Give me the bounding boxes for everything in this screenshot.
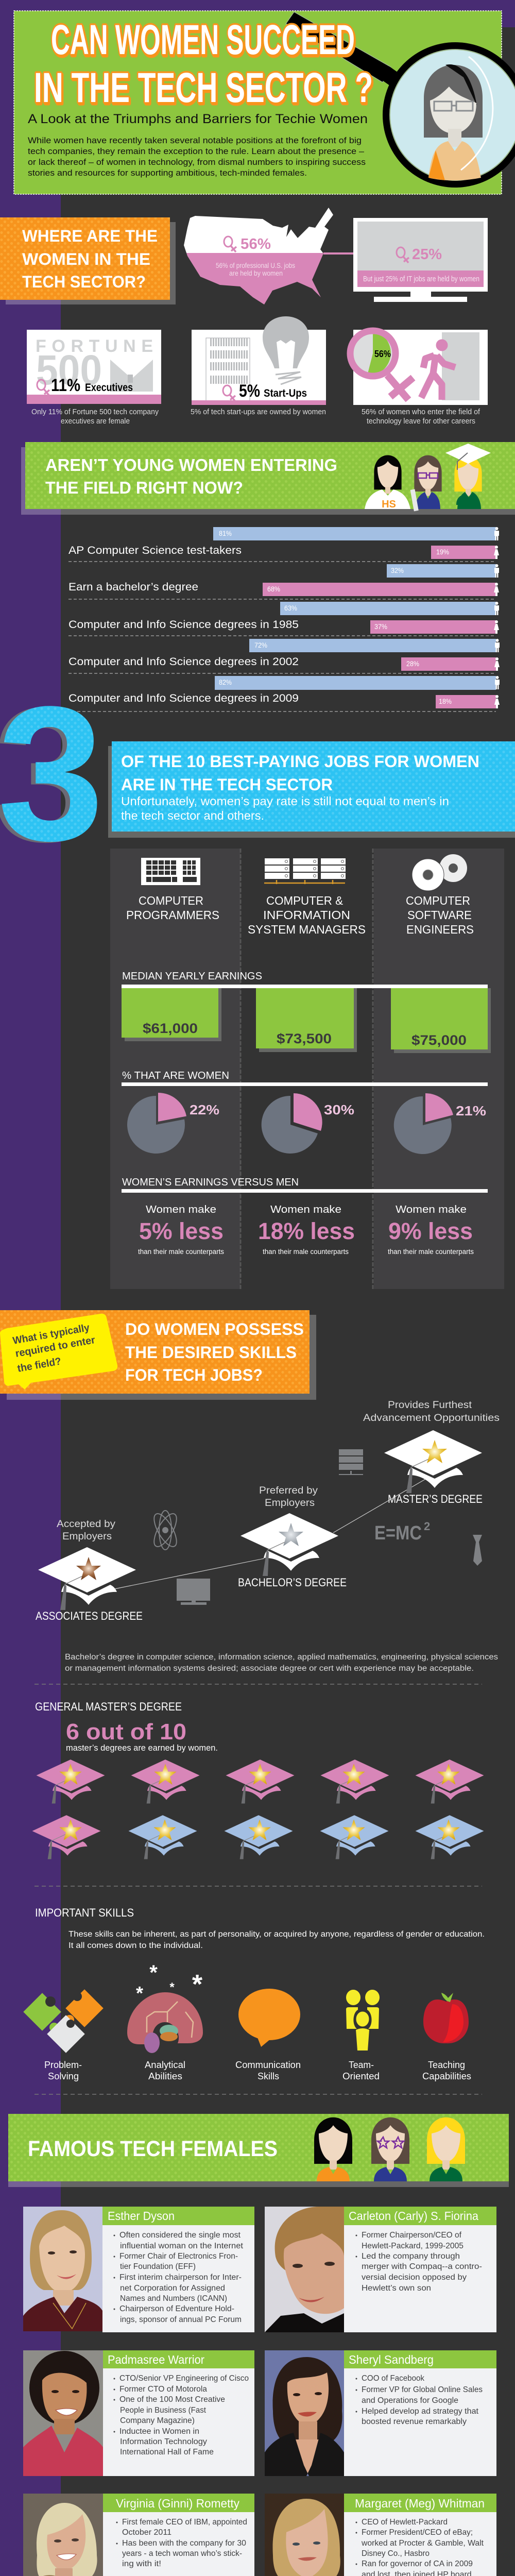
- card: Ginni Rometty: ing with it!: [122, 2560, 161, 2568]
- panel: earnings versus men: 18% less: [258, 1218, 355, 1244]
- icon: briefcase: [110, 356, 153, 392]
- icon: atom: [150, 1511, 181, 1550]
- icon: brain: *: [169, 1980, 175, 1994]
- icon: discs: [412, 854, 467, 891]
- skill labels: [44, 2060, 471, 2081]
- bachelor's cap: BACHELOR’S DEGREE: [238, 1576, 347, 1589]
- chart: percent that are women: 21%: [456, 1103, 486, 1118]
- job titles: SYSTEM MANAGERS: [248, 923, 366, 936]
- card: Padmasree Warrior: Inductee in Women in: [119, 2427, 199, 2436]
- icon: gray monitor: [177, 1579, 210, 1605]
- intro paragraph: or lack thereof – of women in technology, from dismal numbers to inspiring success: [28, 158, 366, 167]
- heading: aren't young women entering: AREN’T YOUNG WOMEN ENTERING: [45, 455, 337, 474]
- callout: what is typically required: What is typically: [12, 1322, 91, 1347]
- photo: Carly Fiorina: [265, 2207, 344, 2332]
- caption: leaving the field: [362, 408, 480, 426]
- card: Sheryl Sandberg: Sheryl Sandberg: [349, 2353, 434, 2366]
- job titles: INFORMATION: [263, 908, 350, 922]
- heading: aren't young women entering: [21, 442, 515, 515]
- card: Esther Dyson: First interim chairperson for Inter-: [119, 2273, 242, 2282]
- icon: walking person: [421, 343, 455, 400]
- heading: 3 of the 10 best-paying jobs: Unfortunately, women’s pay rate is still not equal to men’s in: [121, 794, 449, 808]
- chart: female symbol pie 56%: 56%: [374, 349, 391, 359]
- caption: Fortune 500: executives are female: [61, 417, 130, 426]
- card: Ginni Rometty: October 2011: [122, 2528, 171, 2537]
- panel: important skills: IMPORTANT SKILLS: [35, 1906, 134, 1919]
- job titles: COMPUTER: [139, 894, 203, 907]
- heading: aren't young women entering: THE FIELD RIGHT NOW?: [45, 478, 243, 497]
- chart: percent that are women: 30%: [324, 1102, 354, 1117]
- text: degree paragraph: Bachelor’s degree in computer science, information science, applied mathematics, engineering, physical sciences: [65, 1653, 498, 1662]
- card: Fortune 500 executives: FORTUNE: [36, 336, 153, 356]
- intro paragraph: stories and resources for supporting ambitious, tech-minded females.: [28, 168, 307, 178]
- card: Ginni Rometty: Virginia (Ginni) Rometty: [116, 2497, 239, 2510]
- photo: Padmasree Warrior: [23, 2350, 103, 2476]
- chart: US map 56%: [184, 208, 333, 304]
- title text: [34, 16, 373, 111]
- card: Sheryl Sandberg: boosted revenue remarkably: [362, 2417, 467, 2426]
- caption: leaving the field: 56% of women who enter the field of: [362, 408, 480, 416]
- chart: female symbol pie 56%: [350, 331, 413, 400]
- panel: important skills: These skills can be inherent, as part of personality, or acquired by anyone, regardless of gender or education.: [68, 1930, 485, 1939]
- card: Esther Dyson: tier Foundation (EFF): [120, 2262, 196, 2271]
- chart: degrees 2009: Computer and Info Science degrees in 2009: [68, 692, 299, 704]
- icon: monitor 25%: [353, 218, 488, 302]
- job titles: PROGRAMMERS: [126, 908, 219, 922]
- card: Esther Dyson: Names and Numbers (ICANN): [120, 2294, 227, 2303]
- panel: job columns: [110, 849, 504, 1289]
- panel: important skills: It all comes down to the individual.: [68, 1941, 203, 1950]
- panel: earnings versus men: 9% less: [388, 1218, 473, 1244]
- card: Esther Dyson: Esther Dyson: [108, 2209, 175, 2223]
- card: Padmasree Warrior: Company Magazine): [120, 2416, 195, 2425]
- card: Meg Whitman: Ran for governor of CA in 2009: [362, 2560, 473, 2568]
- card: Meg Whitman: CEO of Hewlett-Packard: [362, 2518, 448, 2527]
- job titles: ENGINEERS: [406, 923, 474, 936]
- card: Carly Fiorina: versial decision opposed by: [362, 2273, 467, 2282]
- subtitle: A Look at the Triumphs and Barriers for Techie Women: [28, 112, 368, 126]
- skill labels: Team-: [349, 2060, 374, 2070]
- title panel background: [14, 11, 502, 194]
- card: Sheryl Sandberg: [265, 2350, 496, 2476]
- caption: Fortune 500: [31, 408, 159, 426]
- chart: median yearly earnings: [122, 971, 491, 1053]
- formula: E=MC: [374, 1522, 422, 1544]
- heading: where are the women: TECH SECTOR?: [22, 273, 146, 291]
- skill labels: Solving: [48, 2071, 79, 2081]
- heading: where are the women: WOMEN IN THE: [22, 250, 150, 268]
- big number 3: 3: [0, 666, 104, 880]
- panel: earnings versus men: [122, 1177, 488, 1256]
- caption: start-ups: 5% of tech start-ups are owned by women: [191, 408, 326, 416]
- card: start-ups: Start-Ups: [264, 387, 307, 399]
- card: Esther Dyson: Chairperson of Edventure Hold-: [119, 2304, 234, 2313]
- chart: degrees 1985: 37%: [374, 622, 387, 631]
- panel: earnings versus men: Women make: [270, 1204, 341, 1215]
- panel: general master's degree: 6 out of 10: [66, 1719, 186, 1744]
- card: Esther Dyson: Former Chair of Electronics Fron-: [119, 2252, 238, 2261]
- card: Meg Whitman: Margaret (Meg) Whitman: [355, 2497, 485, 2510]
- card: Meg Whitman: worked at Procter & Gamble, Walt: [361, 2539, 484, 2548]
- card: Padmasree Warrior: Padmasree Warrior: [108, 2353, 204, 2366]
- card: Sheryl Sandberg: Helped develop ad strategy that: [362, 2407, 479, 2416]
- card: Padmasree Warrior: One of the 100 Most Creative: [119, 2395, 225, 2404]
- bachelor's cap: Employers: [265, 1498, 315, 1509]
- panel: earnings versus men: 5% less: [139, 1218, 224, 1244]
- icon: brain: *: [149, 1961, 158, 1984]
- master's cap: MASTER’S DEGREE: [388, 1493, 483, 1505]
- callout: what is typically required: [0, 1314, 117, 1389]
- panel: earnings versus men: than their male counterparts: [263, 1248, 349, 1256]
- icon: monitor 25%: But just 25% of IT jobs are held by women: [363, 275, 479, 283]
- associates cap: Employers: [62, 1531, 112, 1542]
- heading: 3 of the 10 best-paying jobs: ARE IN THE TECH SECTOR: [121, 775, 333, 794]
- card: Carly Fiorina: Hewlett’s own son: [362, 2284, 431, 2293]
- icon: three young women: HS: [382, 499, 396, 510]
- chart: degrees 1985: 63%: [284, 604, 297, 612]
- card: Carly Fiorina: [265, 2207, 496, 2332]
- bachelor's cap: [238, 1485, 347, 1589]
- panel: general master's degree: [32, 1700, 484, 1859]
- skill labels: Oriented: [342, 2071, 380, 2081]
- callout: what is typically required: the field?: [16, 1355, 62, 1375]
- callout: what is typically required: required to enter: [14, 1334, 96, 1360]
- icon: team: [346, 1990, 380, 2050]
- card: Esther Dyson: influential woman on the Internet: [120, 2242, 244, 2250]
- intro paragraph: [28, 136, 366, 178]
- panel: general master's degree: GENERAL MASTER’S DEGREE: [35, 1700, 182, 1713]
- chart: degrees 2002: 72%: [254, 641, 267, 649]
- icon: brain: *: [136, 1982, 143, 2004]
- intro paragraph: tech companies, they remain the exception to the rule. Learn about the presence –: [28, 147, 365, 156]
- icon: apple: [423, 1993, 469, 2043]
- chart: degrees 2002: [68, 639, 500, 671]
- panel: earnings versus men: than their male counterparts: [388, 1248, 474, 1256]
- job titles: [126, 894, 474, 936]
- card: Ginni Rometty: First female CEO of IBM, appointed: [122, 2518, 247, 2527]
- card: Fortune 500 executives: [27, 330, 161, 404]
- heading: where are the women: [0, 217, 176, 304]
- card: Carly Fiorina: Former Chairperson/CEO of: [362, 2231, 462, 2240]
- panel: earnings versus men: than their male counterparts: [138, 1248, 224, 1256]
- associates cap: [36, 1519, 143, 1622]
- card: Esther Dyson: Often considered the single most: [119, 2231, 241, 2240]
- text: degree paragraph: or management information systems desired; associate degree or cert with experience may be acceptable.: [65, 1664, 474, 1673]
- card: Carly Fiorina: Led the company through: [362, 2252, 460, 2261]
- chart: percent that are women: % THAT ARE WOMEN: [122, 1070, 229, 1081]
- photo: Sheryl Sandberg: [265, 2350, 344, 2476]
- chart: US map 56%: are held by women: [229, 269, 283, 277]
- chart: US map 56%: 56%: [241, 236, 271, 252]
- card: Ginni Rometty: years - a tech woman who’s stick-: [122, 2549, 242, 2558]
- chart: AP Computer Science: AP Computer Science test-takers: [68, 545, 242, 556]
- card: Meg Whitman: Disney Co., Hasbro: [362, 2549, 430, 2558]
- card: Padmasree Warrior: Former CTO of Motorola: [119, 2385, 207, 2394]
- chart: bachelor's degree: 32%: [391, 566, 404, 574]
- panel: title: [14, 11, 515, 194]
- card: Fortune 500 executives: 11%: [51, 376, 80, 395]
- heading: do women possess the desired skills: DO WOMEN POSSESS: [125, 1320, 304, 1338]
- card: Fortune 500 executives: 500: [36, 347, 102, 394]
- caption: leaving the field: technology leave for other careers: [367, 417, 475, 426]
- card: Sheryl Sandberg: and Operations for Google: [362, 2396, 458, 2405]
- card: Padmasree Warrior: Information Technology: [120, 2437, 207, 2446]
- chart: bachelor's degree: Earn a bachelor’s degree: [68, 581, 198, 593]
- skill labels: Teaching: [428, 2060, 465, 2070]
- arrow: map to monitor: [323, 249, 391, 258]
- icon: keyboard: [141, 858, 200, 885]
- heading: 3 of the 10 best-paying jobs: the tech sector and others.: [121, 809, 264, 822]
- chart: degrees 2002: Computer and Info Science degrees in 2002: [68, 656, 299, 668]
- chart: bachelor's degree: 68%: [267, 585, 280, 593]
- chart: percent that are women: 22%: [190, 1102, 219, 1117]
- card: Carly Fiorina: Hewlett-Packard, 1999-2005: [362, 2242, 464, 2250]
- photo: Meg Whitman: [265, 2494, 344, 2576]
- card: Sheryl Sandberg: COO of Facebook: [362, 2374, 424, 2383]
- card: Ginni Rometty: [23, 2494, 254, 2576]
- icon: brain: [127, 1961, 203, 2053]
- card: start-ups: 5%: [239, 381, 260, 401]
- heading: do women possess the desired skills: [0, 1310, 316, 1400]
- intro paragraph: While women have recently taken several notable positions at the forefront of big: [28, 136, 362, 145]
- heading: where are the women: WHERE ARE THE: [22, 227, 158, 245]
- text: degree paragraph: [65, 1653, 498, 1673]
- chart: US map 56%: 56% of professional U.S. jobs: [216, 261, 295, 269]
- panel: earnings versus men: Women make: [146, 1204, 216, 1215]
- icon: monitor 25%: 25%: [412, 246, 442, 263]
- icon: office building: [206, 338, 250, 400]
- master's cap: Advancement Opportunities: [363, 1413, 500, 1423]
- heading: famous tech females: FAMOUS TECH FEMALES: [28, 2137, 278, 2161]
- icon: gray server: [339, 1449, 363, 1475]
- icon: magnifying glass: [286, 12, 515, 188]
- icon: speech bubble: [238, 1989, 300, 2047]
- card: Meg Whitman: [265, 2494, 496, 2576]
- icon: light bulb: [263, 316, 309, 384]
- chart: degrees 1985: [68, 602, 499, 634]
- formula: 2: [424, 1520, 430, 1533]
- chart: median yearly earnings: $75,000: [411, 1032, 467, 1048]
- skill labels: Analytical: [145, 2060, 185, 2070]
- title text: IN THE TECH SECTOR ?: [34, 64, 373, 111]
- icon: puzzle pieces: [23, 1989, 104, 2053]
- caption: Fortune 500: Only 11% of Fortune 500 tech company: [31, 408, 159, 416]
- master's cap: [363, 1400, 500, 1505]
- card: Meg Whitman: Former President/CEO of eBay;: [362, 2528, 473, 2537]
- card: Padmasree Warrior: [23, 2350, 254, 2476]
- chart: bachelor's degree: [68, 564, 499, 596]
- icon: tie: [473, 1535, 482, 1566]
- card: Sheryl Sandberg: Former VP for Global Online Sales: [362, 2385, 483, 2394]
- heading: do women possess the desired skills: FOR TECH JOBS?: [125, 1366, 263, 1384]
- panel: important skills: [23, 1906, 485, 2081]
- icon: servers: [264, 858, 346, 884]
- chart: degrees 2009: [68, 676, 500, 708]
- job titles: COMPUTER &: [266, 894, 343, 907]
- job titles: COMPUTER: [406, 894, 470, 907]
- chart: median yearly earnings: MEDIAN YEARLY EARNINGS: [122, 971, 262, 982]
- chart: degrees 2002: 28%: [406, 659, 419, 668]
- card: Esther Dyson: ings, sponsor of annual PC Forum: [120, 2315, 242, 2324]
- skill labels: Skills: [258, 2071, 279, 2081]
- master's cap: Provides Furthest: [388, 1400, 472, 1411]
- associates cap: ASSOCIATES DEGREE: [36, 1609, 143, 1622]
- chart: degrees 2009: 82%: [219, 678, 232, 686]
- heading: 3 of the 10 best-paying jobs: OF THE 10 BEST-PAYING JOBS FOR WOMEN: [121, 752, 479, 771]
- photo: Esther Dyson: [23, 2207, 102, 2331]
- panel: earnings versus men: Women make: [396, 1204, 467, 1215]
- card: Ginni Rometty: Has been with the company for 30: [122, 2539, 246, 2548]
- skill labels: Abilities: [148, 2071, 182, 2081]
- chart: percent that are women: [122, 1070, 488, 1154]
- card: Carly Fiorina: Carleton (Carly) S. Fiorina: [349, 2209, 478, 2223]
- skill labels: Capabilities: [422, 2071, 471, 2081]
- heading: do women possess the desired skills: THE DESIRED SKILLS: [125, 1343, 297, 1362]
- icon: three young women: [365, 444, 491, 511]
- card: Esther Dyson: [23, 2207, 254, 2332]
- chart: median yearly earnings: $73,500: [277, 1031, 332, 1046]
- chart: degrees 1985: Computer and Info Science degrees in 1985: [68, 619, 299, 631]
- heading: 3 of the 10 best-paying jobs: [108, 741, 515, 838]
- card: leaving the field: [350, 330, 488, 405]
- chart: degrees 2009: 18%: [439, 697, 452, 705]
- chart: AP Computer Science: 19%: [436, 548, 449, 556]
- card: Esther Dyson: net Corporation for Assigned: [120, 2284, 225, 2293]
- icon: three cartoon women: [314, 2117, 465, 2181]
- bachelor's cap: Preferred by: [259, 1485, 318, 1496]
- card: Carly Fiorina: merger with Compaq--a contro-: [362, 2262, 482, 2271]
- associates cap: Accepted by: [57, 1519, 116, 1530]
- card: Padmasree Warrior: People in Business (Fast: [120, 2406, 207, 2415]
- card: Padmasree Warrior: CTO/Senior VP Engineering of Cisco: [119, 2374, 249, 2383]
- chart: degree staircase: [36, 1400, 500, 1622]
- card: Fortune 500 executives: Executives: [85, 382, 133, 394]
- chart: AP Computer Science: 81%: [219, 529, 232, 537]
- pictogram: ten caps: [32, 1759, 484, 1859]
- panel: earnings versus men: WOMEN’S EARNINGS VERSUS MEN: [122, 1177, 299, 1188]
- skill labels: Problem-: [44, 2060, 82, 2070]
- card: start-ups: [192, 316, 326, 405]
- panel: general master's degree: master’s degrees are earned by women.: [66, 1743, 218, 1753]
- card: Padmasree Warrior: International Hall of Fame: [120, 2448, 214, 2456]
- job titles: SOFTWARE: [407, 908, 472, 922]
- icon: brain: *: [192, 1970, 203, 1999]
- photo: Ginni Rometty: [23, 2494, 103, 2576]
- chart: AP Computer Science: [68, 527, 499, 559]
- chart: median yearly earnings: $61,000: [143, 1021, 198, 1036]
- heading: famous tech females: [8, 2114, 509, 2187]
- skill labels: Communication: [235, 2060, 301, 2070]
